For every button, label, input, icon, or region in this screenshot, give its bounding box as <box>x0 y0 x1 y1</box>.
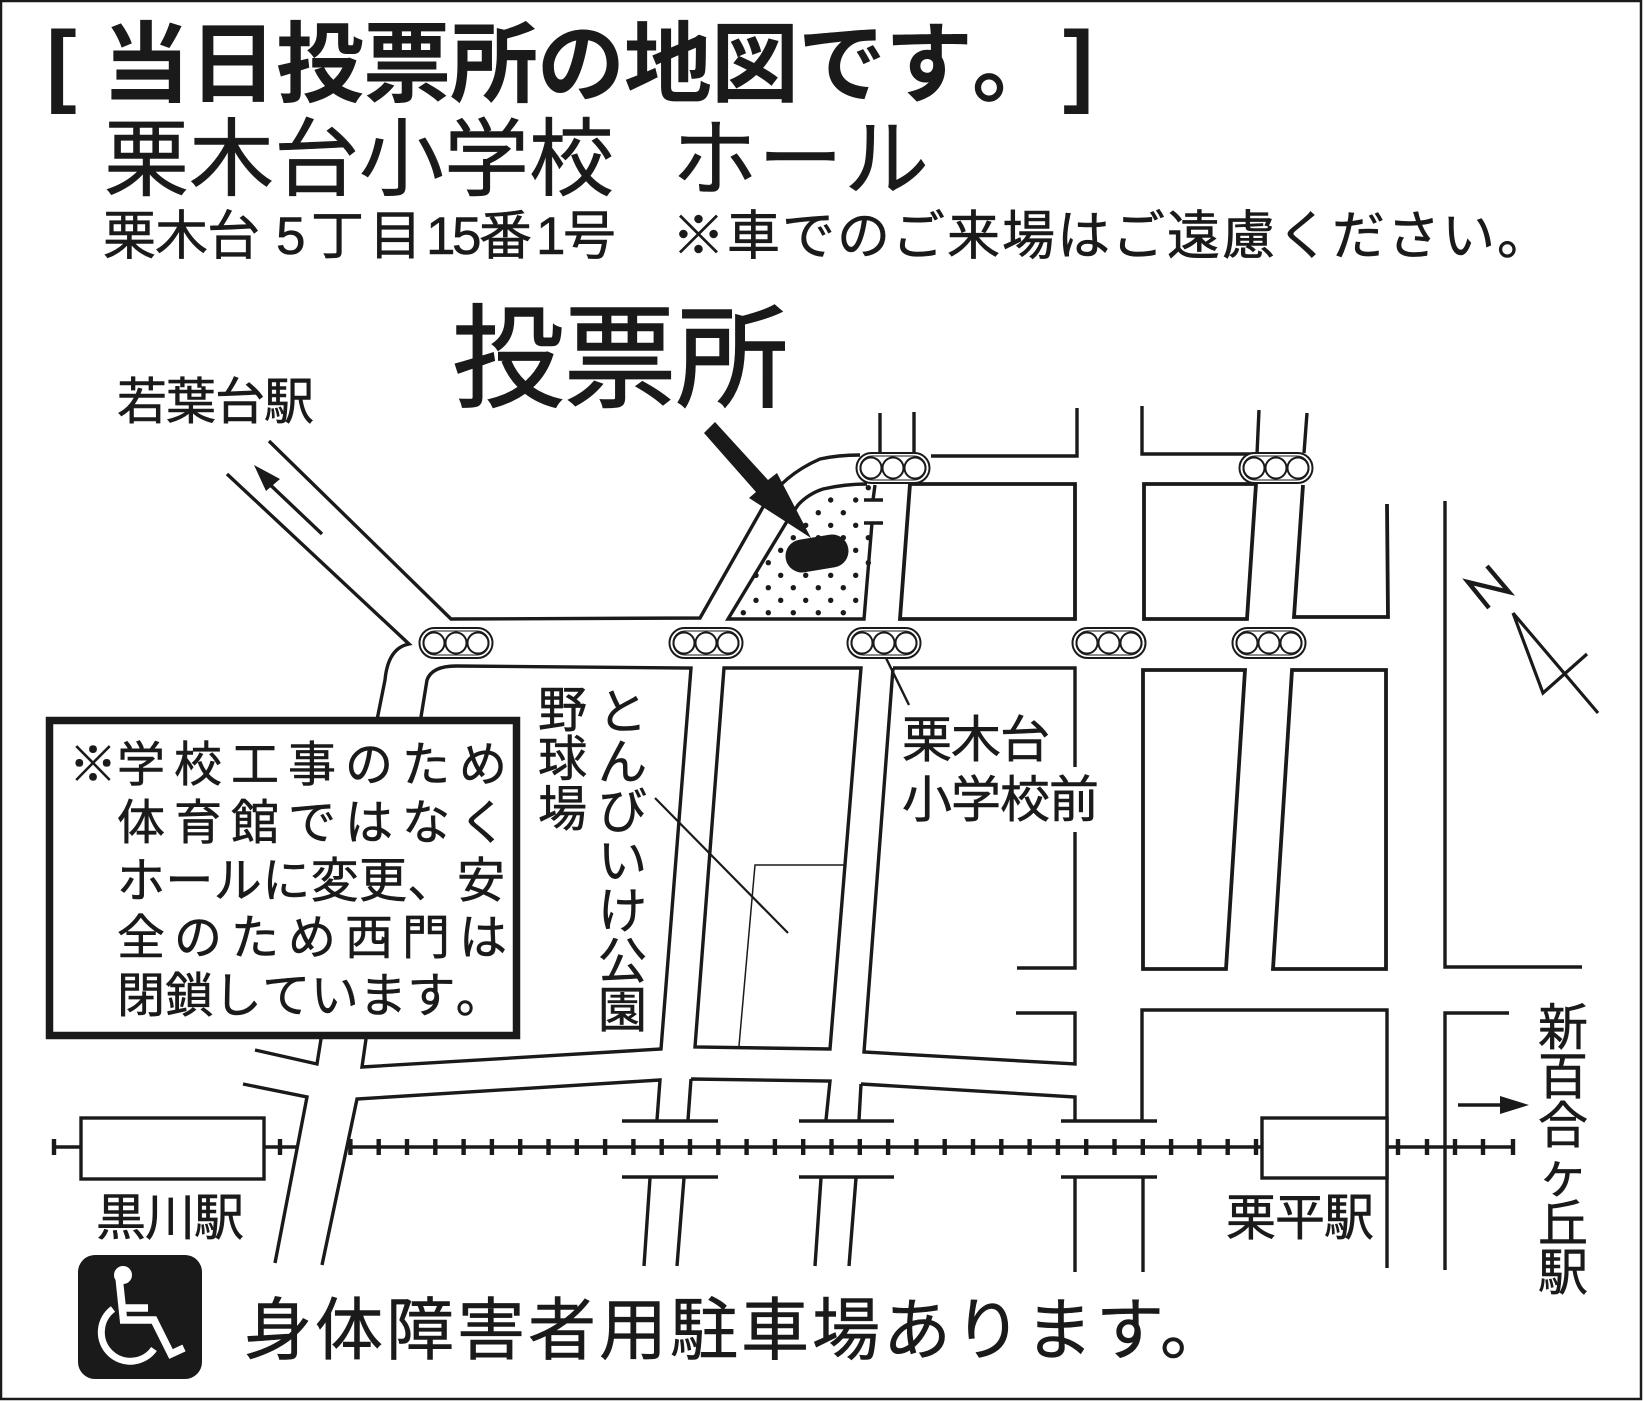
block: center <box>1143 670 1386 969</box>
label: Kurihira station: 栗平駅 <box>1226 1190 1374 1246</box>
arrow: direction to Wakabadai <box>254 465 322 534</box>
signal 3 <box>420 628 492 658</box>
label: Wakabadai station: 若葉台駅 <box>117 374 314 430</box>
road: south of park <box>243 1079 1075 1265</box>
callout text: 閉鎖しています。 <box>117 970 504 1023</box>
callout text: ホールに変更、安 <box>117 855 505 908</box>
road stubs south of railway <box>644 1178 1143 1272</box>
railway crossing bars <box>622 1121 1157 1177</box>
label: Shin-Yurigaoka station: 新百合ヶ丘駅 <box>1538 1000 1588 1301</box>
signal 1 <box>856 453 930 483</box>
block: baseball and park <box>695 668 861 1049</box>
block: east of school road <box>864 668 1075 1064</box>
railway line <box>54 1139 1515 1155</box>
accessible parking notice: 身体障害者用駐車場あります。 <box>244 1293 1228 1369</box>
signal 7 <box>1232 628 1306 658</box>
venue name: ホール <box>672 113 929 208</box>
callout text: ※学校工事のため <box>69 739 507 792</box>
callout text: 体育館ではなく <box>117 797 507 850</box>
title: ] <box>1063 13 1094 115</box>
address and parking notice: 栗木台5丁目15番1号 <box>103 207 616 266</box>
callout <box>50 720 516 1036</box>
label: polling place: 投票所 <box>452 297 788 422</box>
address and parking notice <box>103 207 1550 266</box>
school plan lines <box>739 865 845 1046</box>
label: Kurikidai school stop <box>902 712 1099 828</box>
callout text: 全のため西門は <box>117 912 507 965</box>
block: north row <box>900 484 1388 619</box>
station: Kurihira <box>1262 1118 1387 1178</box>
road map <box>54 406 1598 1272</box>
school building <box>802 551 832 556</box>
road: block edges north <box>880 406 1307 456</box>
block: Kurihira station area <box>1142 1010 1387 1268</box>
north arrow <box>1468 566 1598 713</box>
road: to Wakabadai <box>269 441 860 619</box>
label: Kurikidai school stop: 栗木台 <box>902 712 1050 768</box>
title: [ <box>46 13 77 115</box>
signal 6 <box>1072 628 1146 658</box>
signal 5 <box>848 628 920 658</box>
railway ticks <box>54 1139 1513 1155</box>
station: Kurokawa <box>81 1118 264 1179</box>
signal 4 <box>670 628 742 658</box>
venue name: 栗木台小学校 <box>104 113 614 208</box>
signal 2 <box>1240 453 1312 483</box>
school grounds dots <box>743 488 868 613</box>
leader: Kurikidai school stop <box>886 658 909 705</box>
address and parking notice: ※車でのご来場はご遠慮ください。 <box>672 207 1550 266</box>
arrow: to Shin-Yurigaoka <box>1458 1096 1529 1114</box>
label: Kurokawa station: 黒川駅 <box>96 1190 244 1246</box>
icon: wheelchair accessible <box>78 1255 202 1379</box>
road: lower-left road <box>227 474 409 730</box>
callout text <box>69 739 507 1023</box>
blocks: south of main road <box>255 666 691 1067</box>
title: 当日投票所の地図です。 <box>102 15 1060 114</box>
label: Tonbi-ike park: とんびいけ公園 <box>598 686 647 1038</box>
leader: park <box>655 798 788 933</box>
label: baseball field: 野球場 <box>538 684 587 837</box>
big arrow to polling place <box>704 422 811 538</box>
roads: east boundary <box>1445 501 1582 1270</box>
venue name <box>104 113 929 208</box>
label: Kurikidai school stop: 小学校前 <box>902 772 1099 828</box>
school grounds outline <box>728 484 883 619</box>
